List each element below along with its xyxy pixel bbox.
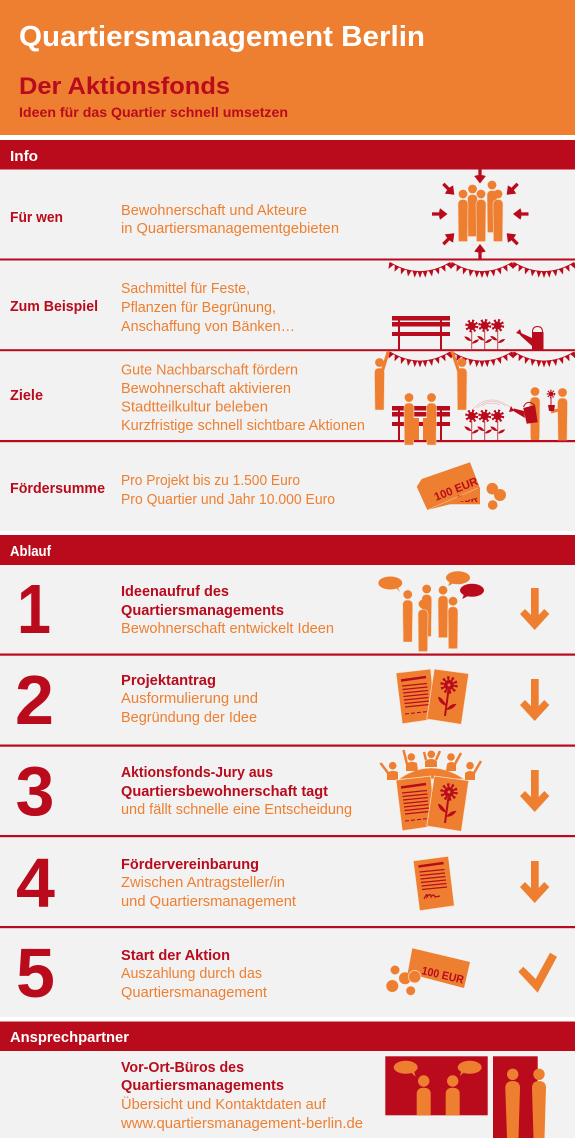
contact text: www.quartiersmanagement-berlin.de	[120, 1116, 363, 1132]
row: Fördersumme: Pro Quartier und Jahr 10.000 Euro	[121, 492, 335, 508]
row: Zum Beispiel: Zum Beispiel	[10, 299, 98, 315]
section heading: Info	[0, 140, 575, 170]
arrow down	[520, 588, 549, 630]
step 1 text	[121, 584, 334, 637]
row: Fördersumme: Fördersumme	[10, 481, 105, 497]
step 4 text: Fördervereinbarung	[121, 857, 259, 873]
step 5	[16, 934, 557, 1012]
step 3 text: Aktionsfonds-Jury aus	[121, 765, 273, 781]
icon: people with speech bubbles	[378, 571, 484, 652]
step 1 text: Bewohnerschaft entwickelt Ideen	[121, 621, 334, 637]
number 2: 2	[15, 661, 54, 739]
section heading: Ablauf	[0, 535, 575, 565]
header panel	[0, 0, 575, 140]
icon: office with two people talking	[385, 1056, 488, 1115]
row: Fördersumme	[10, 473, 335, 508]
icon: jury around table with documents	[380, 750, 481, 831]
step 3	[16, 750, 549, 831]
tagline: Ideen für das Quartier schnell umsetzen	[19, 104, 288, 120]
icon: check mark	[518, 953, 557, 993]
row: Ziele: Gute Nachbarschaft fördern	[121, 362, 298, 378]
icon: banknotes and coins: EUR	[457, 494, 479, 504]
section heading: Ablauf: Ablauf	[10, 544, 51, 560]
panel: Ansprechpartner	[0, 1022, 575, 1138]
step 4 text: und Quartiersmanagement	[121, 894, 296, 910]
step 5 text: Auszahlung durch das	[121, 966, 262, 982]
number 3: 3	[16, 752, 54, 830]
step 1 text: Ideenaufruf des	[121, 584, 229, 600]
step 4 text	[121, 857, 296, 910]
icon: banknotes and coins: 100 EUR	[433, 476, 481, 504]
section heading: Ansprechpartner	[0, 1022, 575, 1051]
title: Quartiersmanagement Berlin	[19, 21, 425, 53]
subtitle: Der Aktionsfonds	[19, 73, 230, 100]
icon: door with two people	[493, 1056, 546, 1138]
panel: Ablauf	[0, 535, 575, 1022]
step 2 text: Projektantrag	[121, 673, 216, 689]
step 5 text	[121, 948, 267, 1001]
icon: banknotes and coins	[417, 462, 506, 510]
step 2 text	[121, 673, 258, 726]
step 5 text: Start der Aktion	[121, 948, 230, 964]
panel: Info	[0, 140, 575, 535]
arrow down	[520, 770, 549, 812]
row: Ziele	[10, 362, 365, 434]
row: Für wen: Bewohnerschaft und Akteure	[121, 203, 307, 219]
row: Zum Beispiel: Anschaffung von Bänken…	[121, 319, 295, 335]
step 1	[17, 570, 549, 652]
row: Zum Beispiel: Sachmittel für Feste,	[121, 281, 250, 297]
step 4 text: Zwischen Antragsteller/in	[121, 875, 285, 891]
contact text: Übersicht und Kontaktdaten auf	[121, 1095, 327, 1113]
contact text: Vor-Ort-Büros des	[121, 1060, 244, 1076]
contact text: Quartiersmanagements	[121, 1078, 284, 1094]
step 3 text: Quartiersbewohnerschaft tagt	[121, 784, 328, 800]
row: Ziele: Ziele	[10, 388, 43, 404]
icon: garlands, bench, flowers, watering can	[388, 262, 575, 350]
step 3 text	[121, 765, 352, 818]
step 5 text: Quartiersmanagement	[121, 985, 267, 1001]
step 2 text: Begründung der Idee	[121, 710, 257, 726]
row: Für wen: Für wen	[10, 210, 63, 226]
step 2 text: Ausformulierung und	[121, 691, 258, 707]
number 1: 1	[17, 570, 51, 648]
section heading: Info: Info	[10, 149, 38, 165]
row: Für wen	[10, 203, 339, 237]
row: Für wen: in Quartiersmanagementgebieten	[121, 221, 339, 237]
arrow down	[520, 861, 549, 903]
icon: application documents	[396, 669, 469, 724]
row: Ziele: Bewohnerschaft aktivieren	[121, 381, 291, 397]
step 4	[16, 844, 549, 922]
number 4: 4	[16, 844, 55, 922]
row: Ziele: Stadtteilkultur beleben	[121, 400, 268, 416]
icon: banknote and coins	[386, 948, 470, 995]
step 1 text: Quartiersmanagements	[121, 603, 284, 619]
step 3 text: und fällt schnelle eine Entscheidung	[121, 802, 352, 818]
row: Zum Beispiel	[10, 281, 295, 335]
row: Zum Beispiel: Pflanzen für Begrünung,	[121, 300, 276, 316]
icon: signed agreement	[413, 856, 454, 911]
row: Ziele: Kurzfristige schnell sichtbare Aktionen	[121, 418, 365, 434]
icon: group of people with arrows pointing in	[432, 168, 528, 260]
number 5: 5	[16, 934, 55, 1012]
contact text	[120, 1060, 363, 1132]
step 2	[15, 661, 549, 739]
arrow down	[520, 679, 549, 721]
section heading: Ansprechpartner: Ansprechpartner	[10, 1030, 129, 1046]
icon: banknote and coins: 100 EUR	[420, 965, 466, 987]
row: Fördersumme: Pro Projekt bis zu 1.500 Euro	[121, 473, 300, 489]
icon: community scene	[374, 351, 575, 445]
